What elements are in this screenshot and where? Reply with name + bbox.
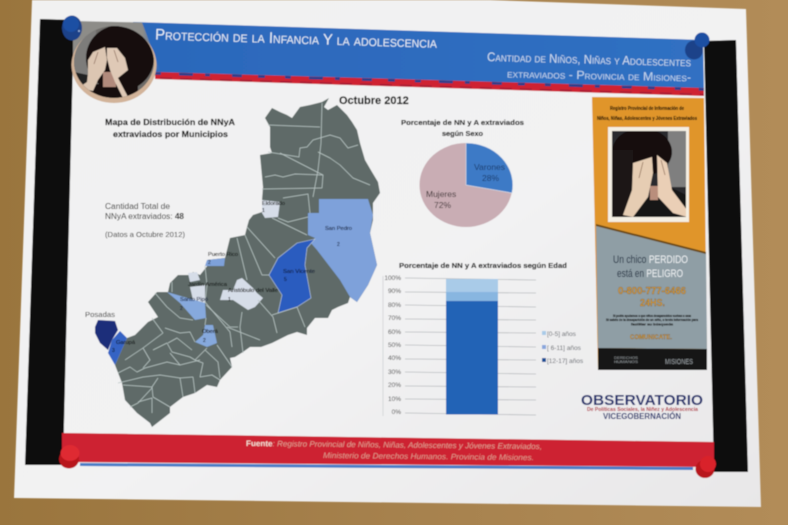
poster heading <box>597 106 697 122</box>
Observatorio logo: VICEGOBERNACIÓN <box>603 412 681 421</box>
municipality labels: Santo Pipó <box>180 297 208 303</box>
poster phone: 0-800-777-6466 <box>618 286 686 297</box>
pin: red bottom left <box>59 445 80 468</box>
hand left <box>78 47 107 91</box>
Santo Pipo <box>167 292 206 320</box>
pie chart: sexo: 28% <box>482 173 499 183</box>
stacked bar chart: edad: 10% <box>388 396 401 403</box>
pin: blue top right <box>685 32 710 60</box>
pie chart: sexo: Mujeres <box>426 189 456 199</box>
stacked bar chart: edad: 40% <box>388 355 401 362</box>
Aristobulo del Valle <box>220 278 263 310</box>
Observatorio logo: De Políticas Sociales, la Niñez y Adolescencia <box>587 407 698 413</box>
poster left hand <box>623 157 653 217</box>
bar chart legend: [12-17] años <box>547 358 584 365</box>
department borders <box>118 103 370 413</box>
poster heading: Niños, Niñas, Adolescentes y Jóvenes Extraviados <box>597 116 697 122</box>
right black strip <box>704 40 748 472</box>
stacked bar chart: edad <box>383 275 536 416</box>
poster phone: 24HS. <box>640 298 665 309</box>
San Pedro <box>308 199 377 302</box>
poster logos: MISIONES <box>665 359 693 366</box>
stacked bar chart: edad: 30% <box>388 369 401 376</box>
poster phone <box>618 286 686 309</box>
municipality labels: Eldorado <box>262 201 285 207</box>
Garupa <box>108 331 127 365</box>
stacked bar chart: edad: 70% <box>388 315 401 322</box>
stacked bar chart: edad: 20% <box>388 382 401 389</box>
header subtitle line 2: extraviados - Provincia de Misiones- <box>507 67 691 84</box>
stacked bar chart: edad: 100% <box>384 275 401 282</box>
municipality labels: San Pedro <box>325 226 352 232</box>
stacked bar chart: edad: 60% <box>388 329 401 336</box>
municipality labels: 2 <box>180 306 183 312</box>
municipality labels: Oberá <box>202 329 218 335</box>
pie chart title: según Sexo <box>442 129 483 138</box>
pie chart title <box>401 118 524 138</box>
poster small print <box>606 314 699 326</box>
municipality labels: Garupá <box>116 340 135 346</box>
circular photo of child covering face <box>72 25 156 103</box>
pie chart title: Porcentaje de NN y A extraviados <box>401 118 524 127</box>
municipality labels: Puerto Rico <box>208 252 238 258</box>
poster slogan: está en PELIGRO <box>617 268 683 280</box>
bar chart legend: [0-5] años <box>547 331 577 338</box>
poster small print: facilitar su búsqueda <box>631 322 674 326</box>
grey strip behind photo <box>73 21 160 70</box>
poster call to action: COMUNICATE. <box>630 334 672 341</box>
poster grey panel <box>596 225 707 349</box>
total block: (Datos a Octubre 2012) <box>105 230 186 239</box>
Puerto Rico <box>205 258 225 266</box>
map of Misiones <box>85 98 380 427</box>
poster right hand <box>657 155 687 217</box>
municipality labels: 1 <box>228 297 231 303</box>
Obera <box>195 325 217 347</box>
municipality labels: Jardín América <box>188 282 227 288</box>
map heading: Mapa de Distribución de NNyA <box>105 118 235 127</box>
pie chart: sexo: 72% <box>434 200 451 210</box>
stacked bar chart: edad: 0% <box>392 409 401 416</box>
pie chart: sexo <box>420 143 513 227</box>
bar chart legend <box>542 331 584 365</box>
Eldorado <box>262 200 280 218</box>
municipality labels: 1 <box>262 208 265 214</box>
stacked bar chart: edad: 80% <box>388 302 401 309</box>
date heading: Octubre 2012 <box>339 95 409 107</box>
Observatorio logo <box>581 392 703 421</box>
poster <box>592 97 707 370</box>
map heading <box>105 118 235 139</box>
bar chart title: Porcentaje de NN y A extraviados según Edad <box>399 261 567 270</box>
map heading: extraviados por Municipios <box>113 130 229 139</box>
poster slogan <box>613 254 688 280</box>
province base <box>115 98 380 427</box>
footer band <box>62 433 714 470</box>
municipality labels <box>85 201 352 354</box>
poster heading: Registro Provincial de Información de <box>610 106 684 112</box>
Posadas <box>95 320 118 350</box>
pie chart: sexo: Varones <box>474 162 505 172</box>
header subtitle line 1: Cantidad de Niños, Niñas y Adolescentes <box>487 50 691 69</box>
pin: blue top left <box>62 16 82 40</box>
municipality labels: 5 <box>284 277 287 283</box>
municipality labels: Aristóbulo del Valle <box>228 288 278 294</box>
poster black footer <box>598 348 707 370</box>
bar chart legend: [ 6-11] años <box>547 345 582 352</box>
municipality labels: 2 <box>203 338 206 344</box>
municipality labels: Posadas <box>85 312 116 319</box>
footer source line 1: Fuente: Registro Provincial de Niños, Niñas, Adolescentes y Jóvenes Extraviados, <box>246 439 542 451</box>
poster small print: Si sabés de la desaparición de un niño, o tenés información para <box>606 318 699 322</box>
header title: Protección de la Infancia Y la adolescencia <box>155 27 438 52</box>
left black strip <box>25 19 74 465</box>
poster small print: Si podés ayudarnos a que niños desaparecidos vuelvan a casa <box>613 314 692 318</box>
total block: Cantidad Total de <box>105 202 171 211</box>
stacked bar chart: edad: 50% <box>388 342 401 349</box>
municipality labels: 2 <box>208 260 211 266</box>
municipality labels: 3 <box>112 348 115 354</box>
poster logos: DERECHOS <box>614 356 639 360</box>
header band <box>73 21 704 96</box>
total block: NNyA extraviados: 48 <box>105 212 185 221</box>
Observatorio logo: OBSERVATORIO <box>581 392 703 409</box>
hand right <box>107 48 128 98</box>
footer source line 2: Ministerio de Derechos Humanos. Provincia de Misiones. <box>323 451 534 462</box>
San Vicente <box>269 239 315 313</box>
pin: red bottom right <box>696 456 716 478</box>
Jardin America <box>190 285 205 305</box>
municipality labels: 2 <box>337 242 340 248</box>
poster photo <box>608 127 689 222</box>
stacked bar chart: edad: 90% <box>388 288 401 295</box>
total block <box>105 202 186 239</box>
wavy red strip <box>155 72 704 96</box>
poster logos: HUMANOS <box>614 360 639 364</box>
poster logos <box>614 356 693 366</box>
municipality labels: San Vicente <box>283 269 315 275</box>
poster slogan: Un chico PERDIDO <box>613 254 688 266</box>
